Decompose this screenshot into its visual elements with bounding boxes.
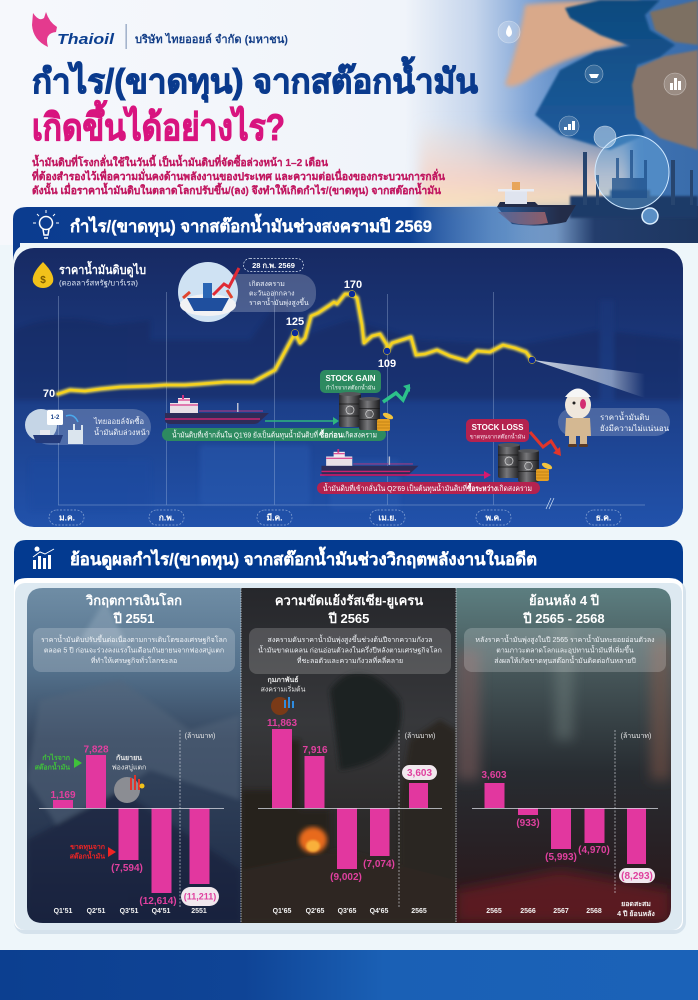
axis labels: 2565 [486, 908, 502, 915]
bar chart 2565-2568: (933) [516, 818, 540, 829]
bar chart 2565-2568 [472, 770, 658, 883]
background blur [456, 620, 671, 923]
annotation: September bubble burst: ฟองสบู่แตก [112, 764, 146, 772]
axis labels: 4 ปี ย้อนหลัง [617, 909, 655, 918]
stock loss label [466, 419, 529, 442]
bar chart 2551: (11,211) [184, 892, 216, 902]
title [32, 56, 478, 148]
stock gain pill: ซื้อก่อน [319, 428, 344, 440]
data labels: 170 [344, 279, 362, 291]
bar chart 2565: (7,074) [363, 859, 395, 870]
axis labels: 2568 [586, 908, 602, 915]
section 1 header [13, 207, 698, 262]
section 2 header [14, 540, 683, 585]
axis labels: 2551 [191, 908, 207, 915]
axis labels: Q2'65 [306, 908, 324, 915]
mascot [565, 388, 591, 447]
strip below header [20, 243, 698, 249]
description box [249, 628, 451, 674]
stock loss label: ขาดทุนจากสต๊อกน้ำมัน [470, 432, 525, 440]
axis labels: 2567 [553, 908, 569, 915]
month labels: พ.ค. [485, 512, 502, 522]
bar chart 2565-2568: 3,603 [481, 770, 507, 781]
axis labels: Q2'51 [87, 908, 105, 915]
barrels and coins: loss [498, 443, 553, 482]
callout: uncertainty: ราคาน้ำมันดิบ [600, 411, 650, 422]
bar chart 2565 [258, 718, 442, 883]
callout: uncertainty [558, 408, 670, 436]
callout: war date and event: 28 ก.พ. 2569 [252, 261, 295, 270]
annotation: stock loss [70, 844, 116, 860]
chart legend: Dubai crude: (ดอลลาร์สหรัฐ/บาร์เรล) [59, 278, 139, 288]
description box: หลังราคาน้ำมันพุ่งสูงในปี 2565 ราคาน้ำมันทะยอยอ่อนตัวลง [475, 633, 655, 644]
panel title: ปี 2551 [113, 611, 154, 626]
bar chart 2565-2568: (4,970) [578, 845, 610, 856]
data labels [43, 279, 396, 400]
divider [614, 730, 616, 894]
month labels: ม.ค. [59, 512, 75, 522]
arrow: crimson [320, 471, 491, 479]
axis labels: Q1'51 [54, 908, 72, 915]
wordmark: Thaioil [57, 32, 115, 48]
month labels: เม.ย. [378, 512, 397, 522]
axis labels [273, 908, 427, 915]
description box: ส่งผลให้เกิดขาดทุนสต๊อกน้ำมันติดต่อกันหลายปี [494, 654, 636, 665]
axis labels: 2566 [520, 908, 536, 915]
description box: ตามภาวะตลาดโลกและอุปทานน้ำมันที่เพิ่มขึ้น [496, 644, 634, 654]
stock gain label: กำไรจากสต๊อกน้ำมัน [326, 384, 376, 392]
axis labels: Q1'65 [273, 908, 291, 915]
chart legend: Dubai crude: ราคาน้ำมันดิบดูไบ [59, 260, 146, 278]
barrels and coins: gain [339, 392, 394, 431]
stock gain label [320, 370, 381, 393]
callout: advance purchase 1-2 months: 1-2 [51, 415, 60, 421]
description box [33, 628, 235, 672]
callout: uncertainty: ยังมีความไม่แน่นอน [600, 424, 670, 433]
month gridlines [58, 290, 645, 505]
arrow: down [530, 432, 561, 456]
description box: ที่ทำให้เศรษฐกิจทั่วโลกชะลอ [91, 656, 177, 665]
section 2 heading: ย้อนดูผลกำไร/(ขาดทุน) จากสต๊อกน้ำมันช่วงวิกฤตพลังงานในอดีต [70, 546, 537, 571]
panel title [275, 593, 423, 626]
panel title: ปี 2565 [328, 611, 369, 626]
month labels: มี.ค. [266, 512, 283, 522]
axis labels: Q4'51 [152, 908, 170, 915]
arrow: up [383, 384, 410, 402]
panel title [522, 593, 605, 626]
icon: bar chart [33, 546, 54, 569]
line chart: Dubai price [58, 294, 532, 394]
data labels: 125 [286, 316, 304, 328]
description box: ตลอด 5 ปี ก่อนจะร่วงลงแรงในเดือนกันยายนจากฟองสบู่แตก [44, 646, 224, 654]
background refinery silhouette [14, 310, 683, 486]
footer band [0, 950, 698, 1000]
bar chart 2565: 11,863 [267, 718, 297, 729]
bar chart 2565-2568: (8,293) [621, 871, 653, 882]
annotation: stock gain: กำไรจาก [42, 753, 70, 762]
title line 1: กำไร/(ขาดทุน) จากสต๊อกน้ำมัน [32, 56, 478, 103]
chart legend: Dubai crude [33, 260, 146, 288]
ship: Q1 cargo [165, 395, 269, 424]
callout: war date and event: ตะวันออกกลาง [249, 290, 295, 298]
callout: war date and event: เกิดสงคราม [249, 280, 285, 288]
axis labels: ยอดสะสม [621, 901, 651, 908]
bar chart 2565: 7,916 [302, 745, 328, 756]
forecast cone [533, 360, 645, 398]
bar chart 2551: (12,614) [139, 896, 177, 907]
data labels: 109 [378, 358, 396, 370]
month labels: ก.พ. [159, 512, 174, 522]
section 1 heading: กำไร/(ขาดทุน) จากสต๊อกน้ำมันช่วงสงครามปี 2569 [70, 213, 432, 237]
stock gain pill [162, 428, 386, 441]
description box: น้ำมันขาดแคลน ก่อนอ่อนตัวลงในครึ่งปีหลังตามเศรษฐกิจโลก [258, 644, 442, 654]
panel title: ความขัดแย้งรัสเซีย-ยูเครน [275, 593, 423, 609]
background ruins and fire [242, 672, 456, 870]
stock gain label: STOCK GAIN [325, 374, 376, 383]
bar chart 2551: 7,828 [83, 744, 109, 756]
panel title: ปี 2565 - 2568 [522, 611, 605, 626]
panel: looking back 4 years [456, 588, 671, 923]
axis labels: Q3'65 [338, 908, 356, 915]
panel: oil price chart [14, 248, 683, 527]
divider [179, 730, 181, 908]
unit: (ล้านบาท) [185, 732, 215, 740]
background rubble [27, 600, 241, 923]
arrow: green [265, 417, 339, 425]
bar chart 2565: 3,603 [407, 768, 432, 779]
axis labels [54, 908, 207, 915]
bar chart 2551 [39, 744, 224, 907]
ship: Q2 cargo [321, 449, 419, 476]
annotation: February war begins: กุมภาพันธ์ [267, 675, 299, 684]
bar chart 2551: 1,169 [50, 790, 76, 801]
intro text: ดังนั้น เมื่อราคาน้ำมันดิบในตลาดโลกปรับขึ้น/(ลง) จึงทำให้เกิดกำไร/(ขาดทุน) จากสต๊อกน้ำมัน [32, 182, 442, 198]
divider [398, 730, 400, 908]
stock loss pill: ซื้อระหว่าง [467, 482, 497, 493]
intro text: น้ำมันดิบที่โรงกลั่นใช้ในวันนี้ เป็นน้ำมันดิบที่จัดซื้อล่วงหน้า 1–2 เดือน [32, 154, 329, 169]
callout: advance purchase 1-2 months: น้ำมันดิบล่วงหน้า [94, 427, 150, 437]
callout: advance purchase 1-2 months: ไทยออยล์จัดซื้อ [93, 416, 144, 426]
axis labels: 2565 [411, 908, 427, 915]
annotation: February war begins: สงครามเริ่มต้น [261, 684, 306, 694]
description box: สงครามดันราคาน้ำมันพุ่งสูงขึ้นช่วงต้นปีจากความกังวล [268, 633, 432, 644]
callout: war date and event [178, 258, 316, 322]
annotation: September bubble burst [112, 754, 146, 803]
unit: (ล้านบาท) [405, 732, 435, 740]
annotation: stock loss: ขาดทุนจาก [70, 844, 105, 851]
stock loss label: STOCK LOSS [472, 423, 524, 432]
panel title [85, 592, 182, 626]
annotation: February war begins [261, 675, 306, 715]
annotation: stock loss: สต๊อกน้ำมัน [70, 850, 105, 860]
stock loss pill: น้ำมันดิบที่เข้ากลั่นใน Q2'69 เป็นต้นทุนน้ำมันดิบที่ [323, 483, 467, 493]
stock loss pill: เกิดสงคราม [497, 484, 532, 493]
stock gain pill: น้ำมันดิบที่เข้ากลั่นใน Q1'69 ยังเป็นต้นทุนน้ำมันดิบที่ [172, 430, 318, 440]
unit: (ล้านบาท) [621, 732, 651, 740]
company name: บริษัท ไทยออยล์ จำกัด (มหาชน) [135, 32, 288, 46]
panel title: วิกฤตการเงินโลก [85, 592, 182, 608]
stock gain pill: เกิดสงคราม [343, 430, 377, 440]
month labels: ธ.ค. [596, 512, 611, 522]
white card shadow [14, 580, 686, 934]
intro text: ที่ต้องสำรองไว้เพื่อความมั่นคงด้านพลังงานของประเทศ และความต่อเนื่องของกระบวนการกลั่น [32, 168, 446, 183]
stock loss pill [317, 482, 540, 494]
axis labels [486, 901, 655, 918]
icon: light bulb [33, 210, 59, 238]
annotation: stock gain: สต๊อกน้ำมัน [35, 760, 70, 772]
chart legend: Dubai crude: $ [40, 275, 46, 286]
title line 2: เกิดขึ้นได้อย่างไร? [32, 100, 285, 148]
callout: war date and event: ราคาน้ำมันพุ่งสูงขึ้น [249, 296, 309, 307]
logo: Thaioil [32, 12, 115, 48]
month labels [49, 510, 621, 525]
annotation: September bubble burst: กันยายน [116, 754, 142, 762]
bar chart 2565: (9,002) [330, 872, 362, 883]
axis labels: Q3'51 [120, 908, 138, 915]
panel: Russia-Ukraine conflict 2565 [241, 588, 456, 923]
axis break [546, 498, 554, 509]
callout: advance purchase 1-2 months [25, 409, 151, 445]
data points [292, 290, 536, 364]
axis labels: Q4'65 [370, 908, 388, 915]
description box [464, 628, 666, 672]
panel column dividers [241, 588, 456, 923]
panel: global financial crisis 2551 [27, 588, 241, 923]
panel title: ย้อนหลัง 4 ปี [529, 593, 599, 608]
header photo: sea, coast and refinery [0, 0, 698, 245]
intro text [32, 154, 446, 198]
description box: ราคาน้ำมันดิบปรับขึ้นต่อเนื่องตามการเติบโตของเศรษฐกิจโลก [41, 633, 227, 644]
description box: ที่ชะลอตัวและความกังวลที่คลี่คลาย [297, 656, 403, 665]
bar chart 2551: (7,594) [111, 863, 143, 874]
bar chart 2565-2568: (5,993) [545, 852, 577, 863]
annotation: stock gain [35, 753, 82, 772]
data labels: 70 [43, 388, 55, 400]
white card [14, 578, 683, 930]
